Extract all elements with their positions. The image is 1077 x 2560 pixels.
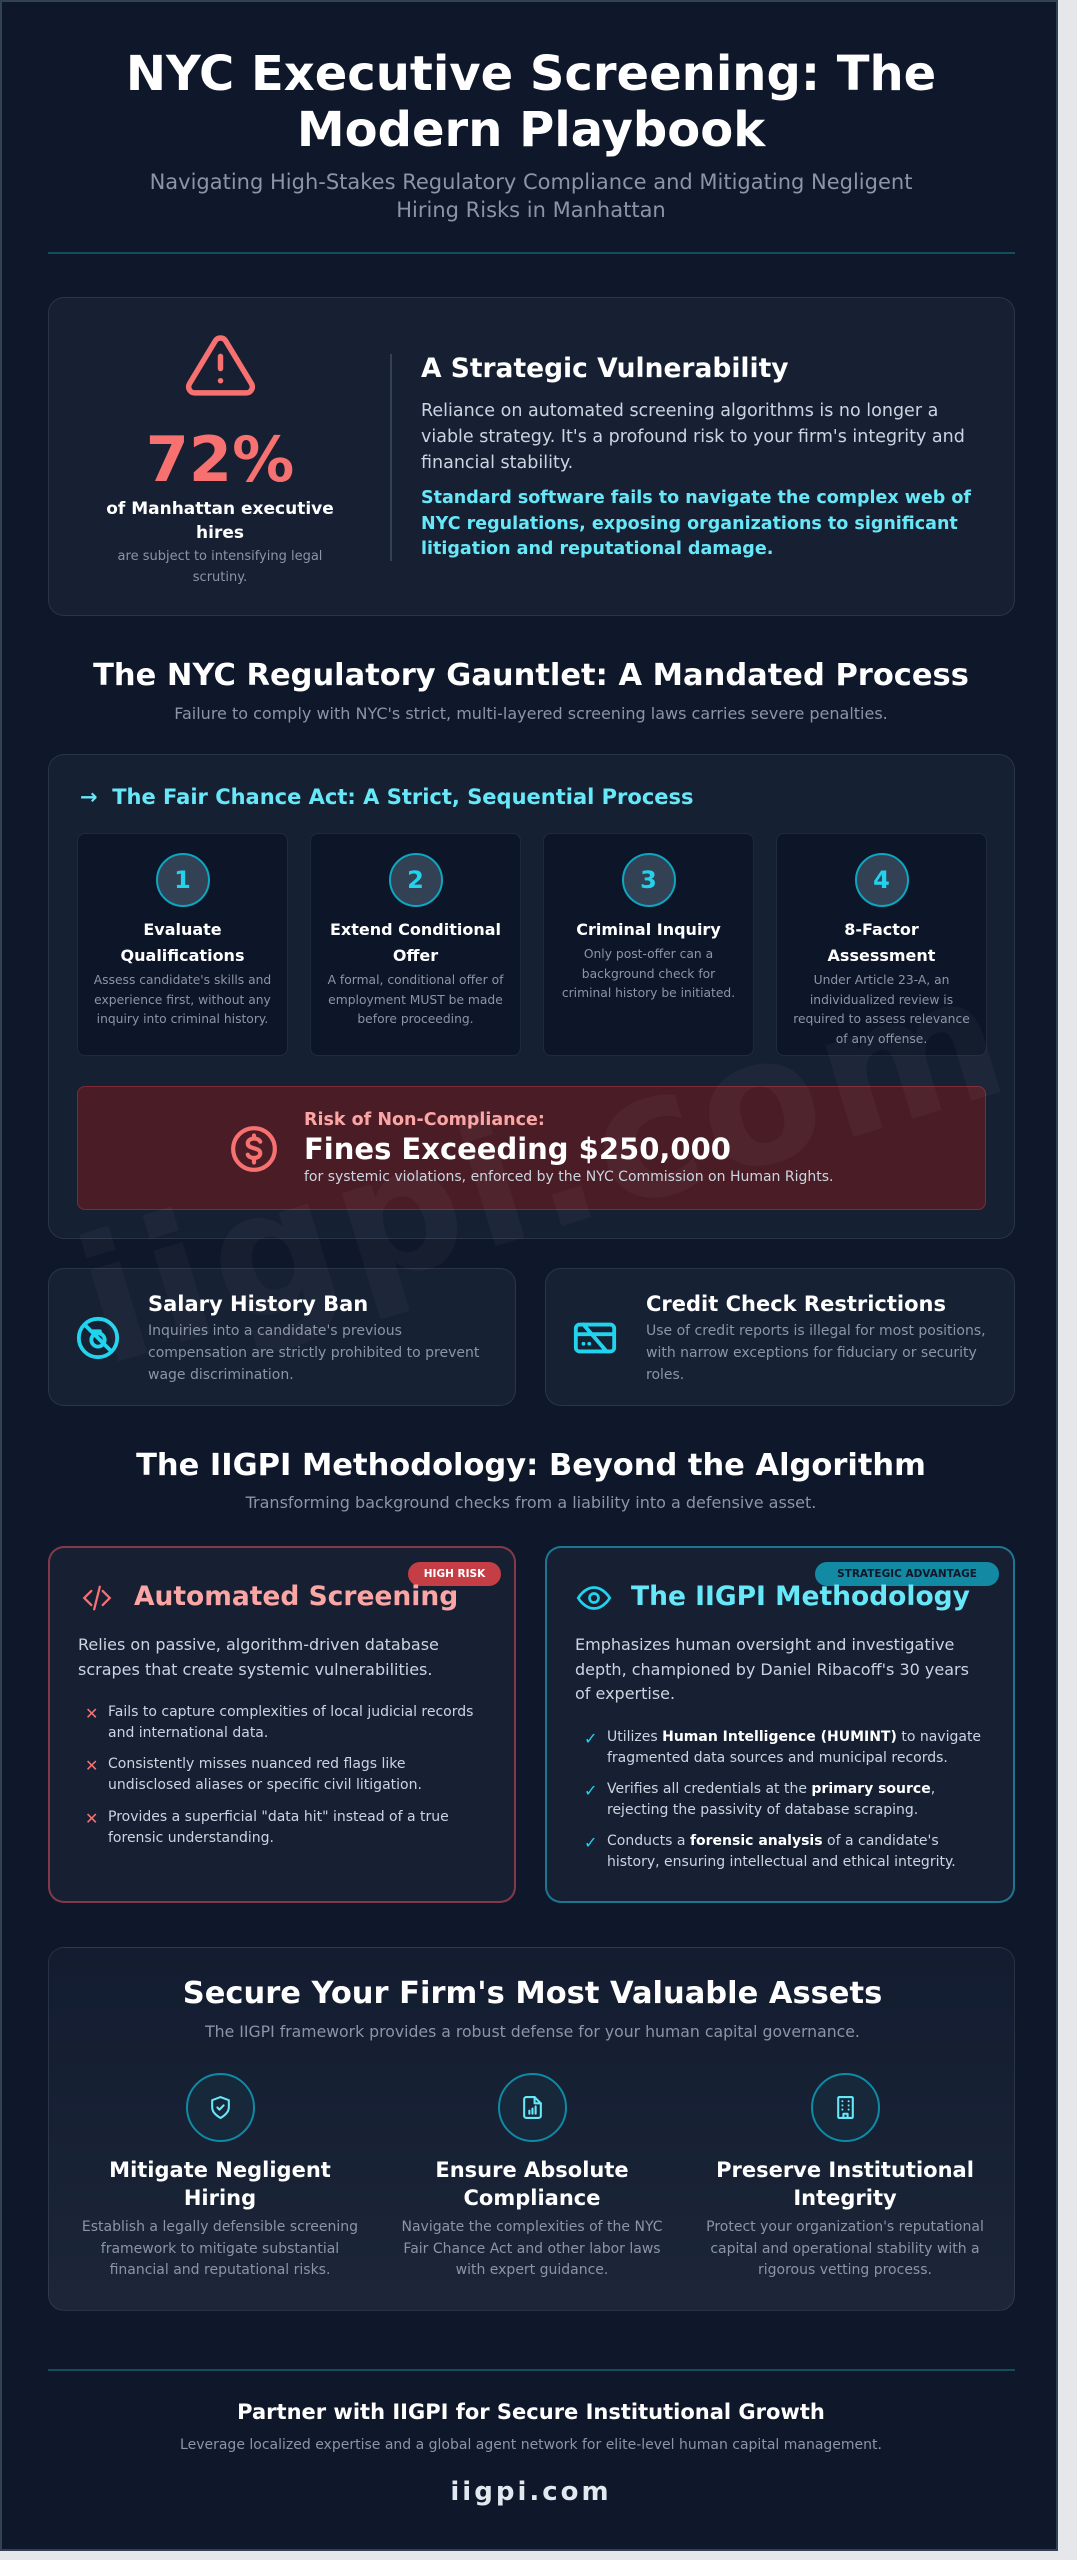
step 4 <box>776 833 987 1056</box>
icon: eye <box>576 1586 612 1610</box>
stat note: scrutiny. <box>193 570 247 585</box>
item: mitigate: Mitigate Negligent <box>109 2158 331 2182</box>
subheading: Failure to comply with NYC's strict, multi-layered screening laws carries severe penalties. <box>174 704 888 723</box>
item: mitigate: framework to mitigate substantial <box>101 2240 339 2256</box>
icon: card <box>574 1322 616 1354</box>
heading: regulatory gauntlet: The NYC Regulatory Gauntlet: A Mandated Process <box>93 658 969 693</box>
panel: fair chance act <box>48 754 1015 1239</box>
panel: iigpi methodology: of expertise. <box>575 1684 675 1703</box>
panel: iigpi methodology: ✓ <box>584 1781 597 1800</box>
callout text: NYC regulations, exposing organizations to significant <box>421 514 958 534</box>
panel: automated screening: ✕ <box>85 1809 98 1828</box>
item: compliance: with expert guidance. <box>456 2262 608 2278</box>
panel: secure assets: The IIGPI framework provides a robust defense for your human capital governance. <box>205 2022 860 2041</box>
stat note: are subject to intensifying legal <box>118 549 322 564</box>
subtitle <box>150 170 912 222</box>
item: compliance: Ensure Absolute <box>435 2158 629 2182</box>
panel heading: → The Fair Chance Act: A Strict, Sequential Process <box>80 785 694 809</box>
icon: dollar <box>231 1126 277 1172</box>
panel: credit check: with narrow exceptions for fiduciary or security <box>646 1345 977 1361</box>
stat label: of Manhattan executive <box>106 499 334 519</box>
item: mitigate: Establish a legally defensible screening <box>82 2219 358 2235</box>
title <box>126 46 936 158</box>
panel: automated screening: ✕ <box>85 1756 98 1775</box>
panel: automated screening: and international data. <box>108 1725 268 1741</box>
step 3: background check for <box>582 967 715 981</box>
subtitle: Hiring Risks in Manhattan <box>396 198 666 222</box>
icon: warning <box>186 335 256 396</box>
footer heading: Partner with IIGPI for Secure Institutional Growth <box>237 2400 825 2424</box>
icon: no-money <box>76 1316 120 1360</box>
panel: iigpi methodology: The IIGPI Methodology <box>631 1581 970 1612</box>
step 1: 1 <box>174 866 191 894</box>
panel: automated screening: Automated Screening <box>134 1581 458 1612</box>
panel: salary history ban <box>48 1268 516 1406</box>
callout: risk of non-compliance: Fines Exceeding $250,000 <box>304 1132 731 1166</box>
badge: high risk <box>408 1562 501 1586</box>
panel: automated screening: scrapes that create systemic vulnerabilities. <box>78 1660 432 1678</box>
step 2: Extend Conditional <box>330 920 501 939</box>
callout: risk of non-compliance <box>77 1086 986 1210</box>
step 1: Evaluate <box>143 920 222 939</box>
step 1: Assess candidate's skills and <box>94 973 271 987</box>
panel: iigpi methodology: ✓ <box>584 1729 597 1748</box>
item: mitigate <box>82 2073 358 2278</box>
step 1 <box>77 833 288 1056</box>
callout: risk of non-compliance: Risk of Non-Compliance: <box>304 1110 545 1130</box>
panel: iigpi methodology: Utilizes Human Intelligence (HUMINT) to navigate <box>607 1729 981 1745</box>
subheading: Transforming background checks from a liability into a defensive asset. <box>246 1493 816 1512</box>
step 2: before proceeding. <box>357 1012 474 1026</box>
step 2: A formal, conditional offer of <box>328 973 503 987</box>
callout text: litigation and reputational damage. <box>421 539 773 559</box>
panel: credit check: roles. <box>646 1367 684 1383</box>
item: mitigate: Hiring <box>184 2186 256 2210</box>
item: integrity: Integrity <box>793 2186 897 2210</box>
panel: iigpi methodology: rejecting the passivity of database scraping. <box>607 1802 918 1818</box>
item: integrity: capital and operational stability with a <box>710 2240 980 2256</box>
item: integrity: Preserve Institutional <box>716 2158 974 2182</box>
watermark: iigpi.com <box>57 932 1032 1406</box>
panel: credit check: Credit Check Restrictions <box>646 1292 946 1316</box>
panel: iigpi methodology: fragmented data sources and municipal records. <box>607 1750 948 1766</box>
panel: salary history ban: Inquiries into a candidate's previous <box>148 1323 402 1339</box>
badge: strategic advantage <box>815 1562 999 1586</box>
stat note <box>118 549 322 585</box>
panel: automated screening: Consistently misses nuanced red flags like <box>108 1756 406 1772</box>
icon: code <box>82 1586 112 1610</box>
panel: secure assets: Secure Your Firm's Most Valuable Assets <box>183 1976 882 2011</box>
text block: viable strategy. It's a profound risk to your firm's integrity and <box>421 427 965 447</box>
panel: credit check: Use of credit reports is illegal for most positions, <box>646 1323 986 1339</box>
panel: automated screening <box>48 1546 516 1903</box>
step 3 <box>543 833 754 1056</box>
step 3: Criminal Inquiry <box>576 920 721 939</box>
item: compliance <box>401 2073 663 2278</box>
step 4: individualized review is <box>810 993 953 1007</box>
step 3: 3 <box>640 866 657 894</box>
panel: automated screening: forensic understanding. <box>108 1830 274 1846</box>
panel: automated screening: Relies on passive, algorithm-driven database <box>78 1635 439 1654</box>
step 2: 2 <box>407 866 424 894</box>
callout text <box>421 488 972 559</box>
panel: credit check <box>545 1268 1015 1406</box>
item: mitigate: financial and reputational risks. <box>110 2262 330 2278</box>
step 2: Offer <box>393 946 438 965</box>
stat label: hires <box>196 523 244 543</box>
item: integrity: rigorous vetting process. <box>758 2262 932 2278</box>
step 4: Under Article 23-A, an <box>814 973 949 987</box>
step 4: of any offense. <box>836 1032 927 1046</box>
panel: automated screening: Fails to capture complexities of local judicial records <box>108 1704 473 1720</box>
panel: strategic vulnerability <box>48 297 1015 616</box>
footer text: Leverage localized expertise and a global agent network for elite-level human capital management. <box>180 2437 882 2453</box>
text block: Reliance on automated screening algorithms is no longer a <box>421 401 938 421</box>
item: integrity <box>706 2073 984 2278</box>
step 4: required to assess relevance <box>793 1012 970 1026</box>
panel: automated screening: Provides a superficial "data hit" instead of a true <box>108 1809 449 1825</box>
panel: salary history ban: Salary History Ban <box>148 1292 368 1316</box>
panel: iigpi methodology <box>545 1546 1015 1903</box>
panel: automated screening: undisclosed aliases or specific civil litigation. <box>108 1777 422 1793</box>
badge: strategic advantage: STRATEGIC ADVANTAGE <box>837 1568 977 1580</box>
item: compliance: Compliance <box>464 2186 600 2210</box>
step 2: employment MUST be made <box>328 993 503 1007</box>
step 1: experience first, without any <box>94 993 271 1007</box>
text block <box>421 401 965 473</box>
panel: iigpi methodology: ✓ <box>584 1833 597 1852</box>
step 3: Only post-offer can a <box>584 947 713 961</box>
item: integrity: Protect your organization's reputational <box>706 2219 984 2235</box>
step 2 <box>310 833 521 1056</box>
panel: iigpi methodology: Emphasizes human oversight and investigative <box>575 1635 954 1654</box>
step 1: Qualifications <box>121 946 244 965</box>
item: compliance: Navigate the complexities of the NYC <box>401 2219 663 2235</box>
step 4: 4 <box>873 866 890 894</box>
panel: automated screening: ✕ <box>85 1704 98 1723</box>
panel: iigpi methodology: Verifies all credentials at the primary source, <box>607 1781 935 1797</box>
stat 72%: 72% <box>146 423 294 496</box>
subtitle: Navigating High-Stakes Regulatory Compliance and Mitigating Negligent <box>150 170 912 194</box>
panel: iigpi methodology: history, ensuring intellectual and ethical integrity. <box>607 1854 956 1870</box>
callout: risk of non-compliance: for systemic violations, enforced by the NYC Commission on Human Rights. <box>304 1169 834 1185</box>
panel: salary history ban: compensation are strictly prohibited to prevent <box>148 1345 479 1361</box>
callout text: Standard software fails to navigate the complex web of <box>421 488 971 508</box>
title: Modern Playbook <box>297 102 765 158</box>
text block: financial stability. <box>421 453 573 473</box>
title: NYC Executive Screening: The <box>126 46 936 102</box>
heading: methodology: The IIGPI Methodology: Beyond the Algorithm <box>136 1448 926 1483</box>
step 4: Assessment <box>828 946 935 965</box>
badge: high risk: HIGH RISK <box>424 1568 485 1580</box>
panel: iigpi methodology: Conducts a forensic analysis of a candidate's <box>607 1833 939 1849</box>
panel: salary history ban: wage discrimination. <box>148 1367 294 1383</box>
item: compliance: Fair Chance Act and other labor laws <box>403 2240 661 2256</box>
panel: iigpi methodology: depth, championed by Daniel Ribacoff's 30 years <box>575 1660 969 1678</box>
panel: secure assets <box>48 1947 1015 2311</box>
heading: A Strategic Vulnerability <box>421 353 789 384</box>
step 3: criminal history be initiated. <box>562 986 735 1000</box>
stat label <box>106 499 334 543</box>
footer url: iigpi.com <box>450 2477 612 2507</box>
step 1: inquiry into criminal history. <box>97 1012 268 1026</box>
step 4: 8-Factor <box>844 920 919 939</box>
